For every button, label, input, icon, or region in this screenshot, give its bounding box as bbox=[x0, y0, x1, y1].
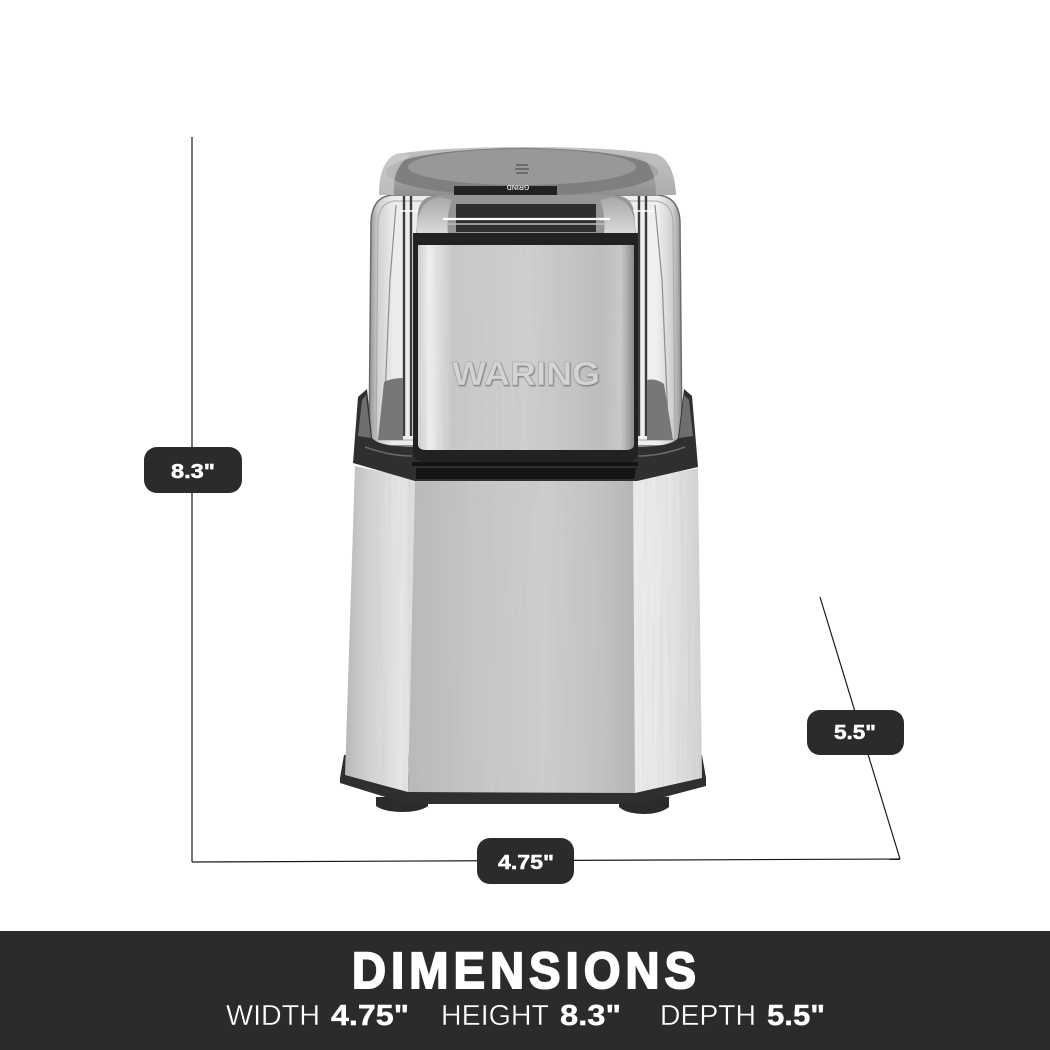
footer band bbox=[0, 931, 1050, 1050]
depth spec: DEPTH bbox=[660, 1000, 756, 1032]
height spec bbox=[441, 1000, 621, 1032]
height spec: HEIGHT bbox=[441, 1000, 549, 1032]
width spec bbox=[226, 1000, 409, 1032]
height dimension line bbox=[191, 137, 193, 862]
depth dimension line bbox=[820, 597, 900, 859]
grinder base plinth bbox=[340, 755, 706, 804]
width dimension line bbox=[192, 859, 900, 862]
collar front band bbox=[412, 462, 638, 479]
clear jar body bbox=[369, 195, 682, 446]
width label pill: 4.75" bbox=[498, 852, 554, 874]
width label pill bbox=[477, 838, 574, 884]
lid label: GRIND bbox=[507, 183, 529, 190]
height label pill: 8.3" bbox=[171, 461, 215, 483]
footer title: DIMENSIONS bbox=[352, 944, 696, 1000]
clear lid bbox=[379, 147, 676, 203]
jar inner posts bbox=[404, 196, 646, 436]
width spec: WIDTH bbox=[226, 1000, 320, 1032]
depth spec bbox=[660, 1000, 825, 1032]
depth spec: 5.5" bbox=[767, 1000, 825, 1032]
stainless grinding cup bbox=[413, 233, 638, 462]
grinder feet bbox=[376, 797, 669, 814]
embossed brand: WARING bbox=[452, 355, 600, 392]
collar bbox=[353, 389, 698, 481]
height label pill bbox=[144, 447, 242, 493]
depth label pill: 5.5" bbox=[834, 722, 876, 744]
inner cup top bbox=[399, 195, 654, 236]
height spec: 8.3" bbox=[560, 1000, 621, 1032]
product photo: Waring spice grinder bbox=[340, 147, 706, 814]
stainless motor housing bbox=[340, 465, 705, 797]
jar inner dark blocks bbox=[378, 378, 673, 440]
width spec: 4.75" bbox=[331, 1000, 409, 1032]
depth label pill bbox=[807, 710, 904, 755]
